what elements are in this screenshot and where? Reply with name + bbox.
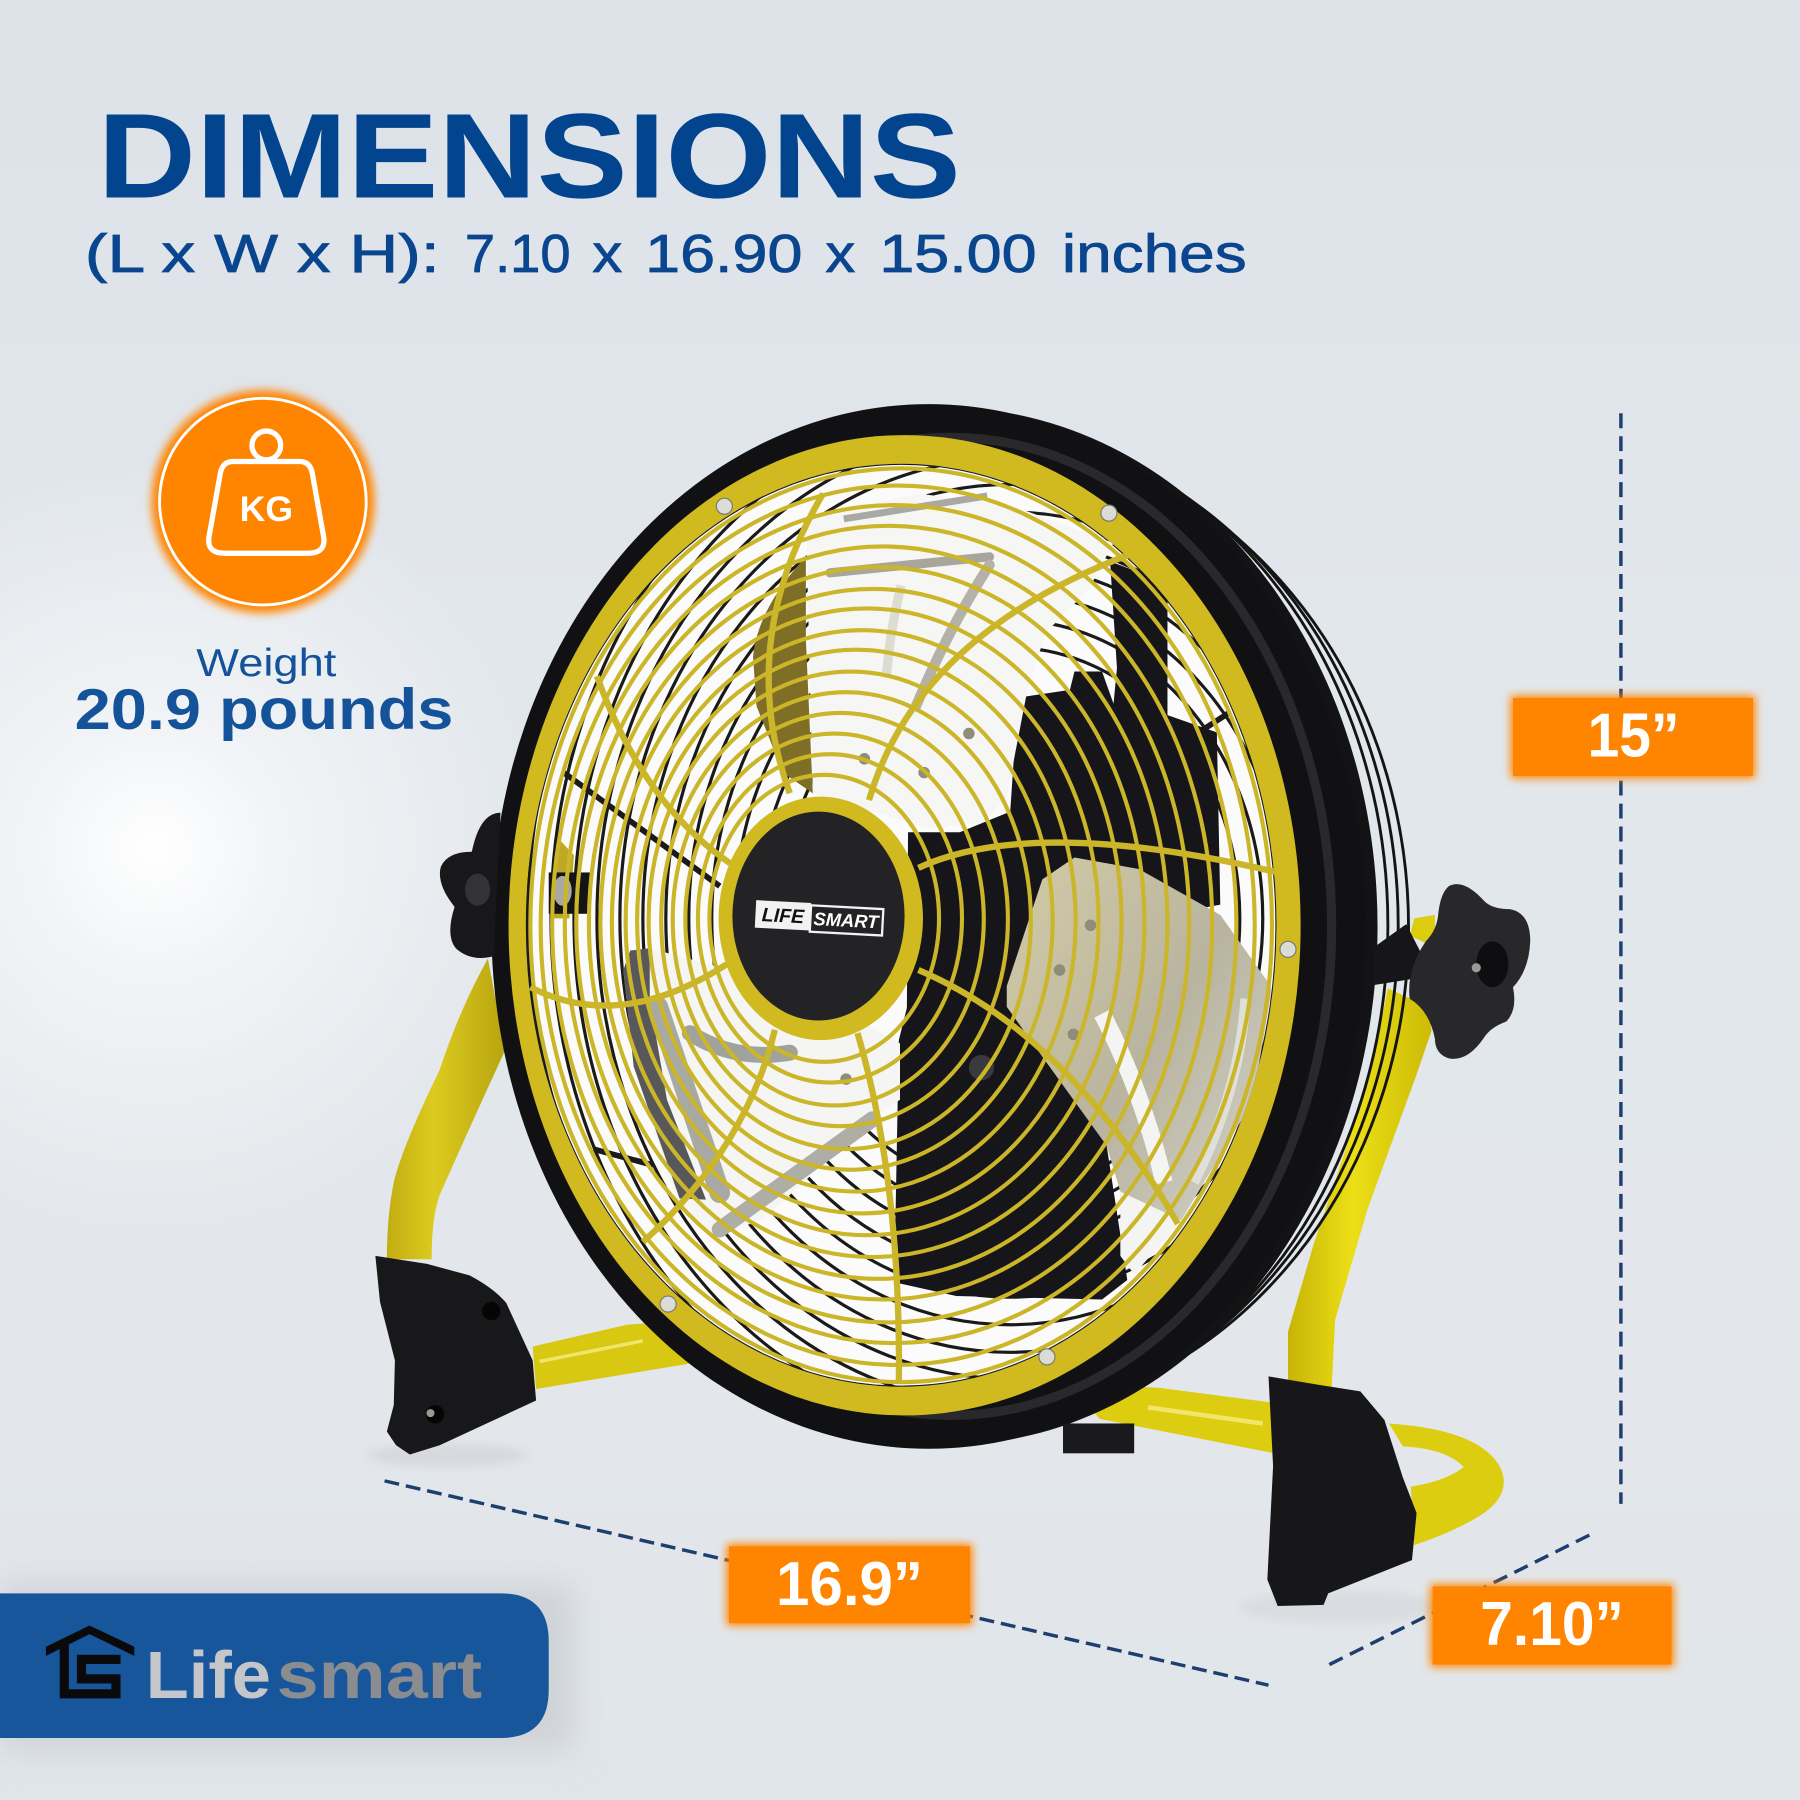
brand name: smart xyxy=(277,1639,482,1713)
blade: right xyxy=(1007,858,1271,1274)
hub logo xyxy=(755,900,883,935)
hub logo: SMART xyxy=(813,908,881,932)
blade rivets xyxy=(840,728,1096,1085)
fan stand: left leg xyxy=(375,959,689,1454)
yellow ring xyxy=(509,435,1301,1415)
weight icon: KG xyxy=(240,489,293,529)
blade: lower left xyxy=(623,948,900,1236)
weight label: Weight xyxy=(196,642,337,685)
adjustment knob: right xyxy=(1374,884,1530,1059)
grille rings xyxy=(530,468,1272,1382)
dimension line: width xyxy=(385,1481,1268,1685)
subtitle: overall dimensions: x xyxy=(825,224,855,284)
label: depth 7.10 inches: 7.10” xyxy=(1480,1590,1624,1659)
brand icon: house xyxy=(46,1626,134,1694)
left pivot bolt xyxy=(549,838,590,918)
subtitle: overall dimensions: (L x W x H): xyxy=(85,224,440,284)
blade: top xyxy=(753,494,1114,829)
adjustment knob: left xyxy=(440,813,501,958)
grille interior xyxy=(526,464,1277,1387)
rear cage wires xyxy=(529,420,1409,1430)
motor housing xyxy=(894,561,1220,1299)
subtitle: overall dimensions: 15.00 xyxy=(879,224,1037,284)
subtitle: overall dimensions: 16.90 xyxy=(645,224,802,284)
rear wire rings xyxy=(526,466,1266,1387)
grille spokes xyxy=(530,494,1278,1383)
grille screws xyxy=(660,498,1296,1365)
brand name: Life xyxy=(146,1639,271,1713)
title: DIMENSIONS xyxy=(98,88,961,223)
hub xyxy=(719,797,923,1040)
dimension line: depth xyxy=(1329,1535,1590,1665)
subtitle: overall dimensions: 7.10 xyxy=(465,224,571,284)
fan product xyxy=(375,349,1530,1606)
hub logo: LIFE xyxy=(761,904,806,928)
subtitle: overall dimensions: x xyxy=(592,224,622,284)
weight value: 20.9 pounds xyxy=(75,678,453,742)
weight icon xyxy=(152,390,374,613)
fan body rim xyxy=(491,404,1378,1449)
label: height 15 inches: 15” xyxy=(1588,702,1679,771)
fan stand: right leg xyxy=(1063,988,1504,1606)
subtitle: overall dimensions xyxy=(85,224,1247,284)
label: width 16.9 inches xyxy=(727,1544,972,1626)
label: depth 7.10 inches xyxy=(1430,1584,1674,1667)
dimension line: height xyxy=(1619,413,1622,1504)
brand panel xyxy=(0,1584,574,1751)
brand name xyxy=(146,1639,482,1713)
label: width 16.9 inches: 16.9” xyxy=(776,1550,923,1619)
subtitle: overall dimensions: inches xyxy=(1062,224,1247,284)
label: height 15 inches xyxy=(1511,696,1755,778)
